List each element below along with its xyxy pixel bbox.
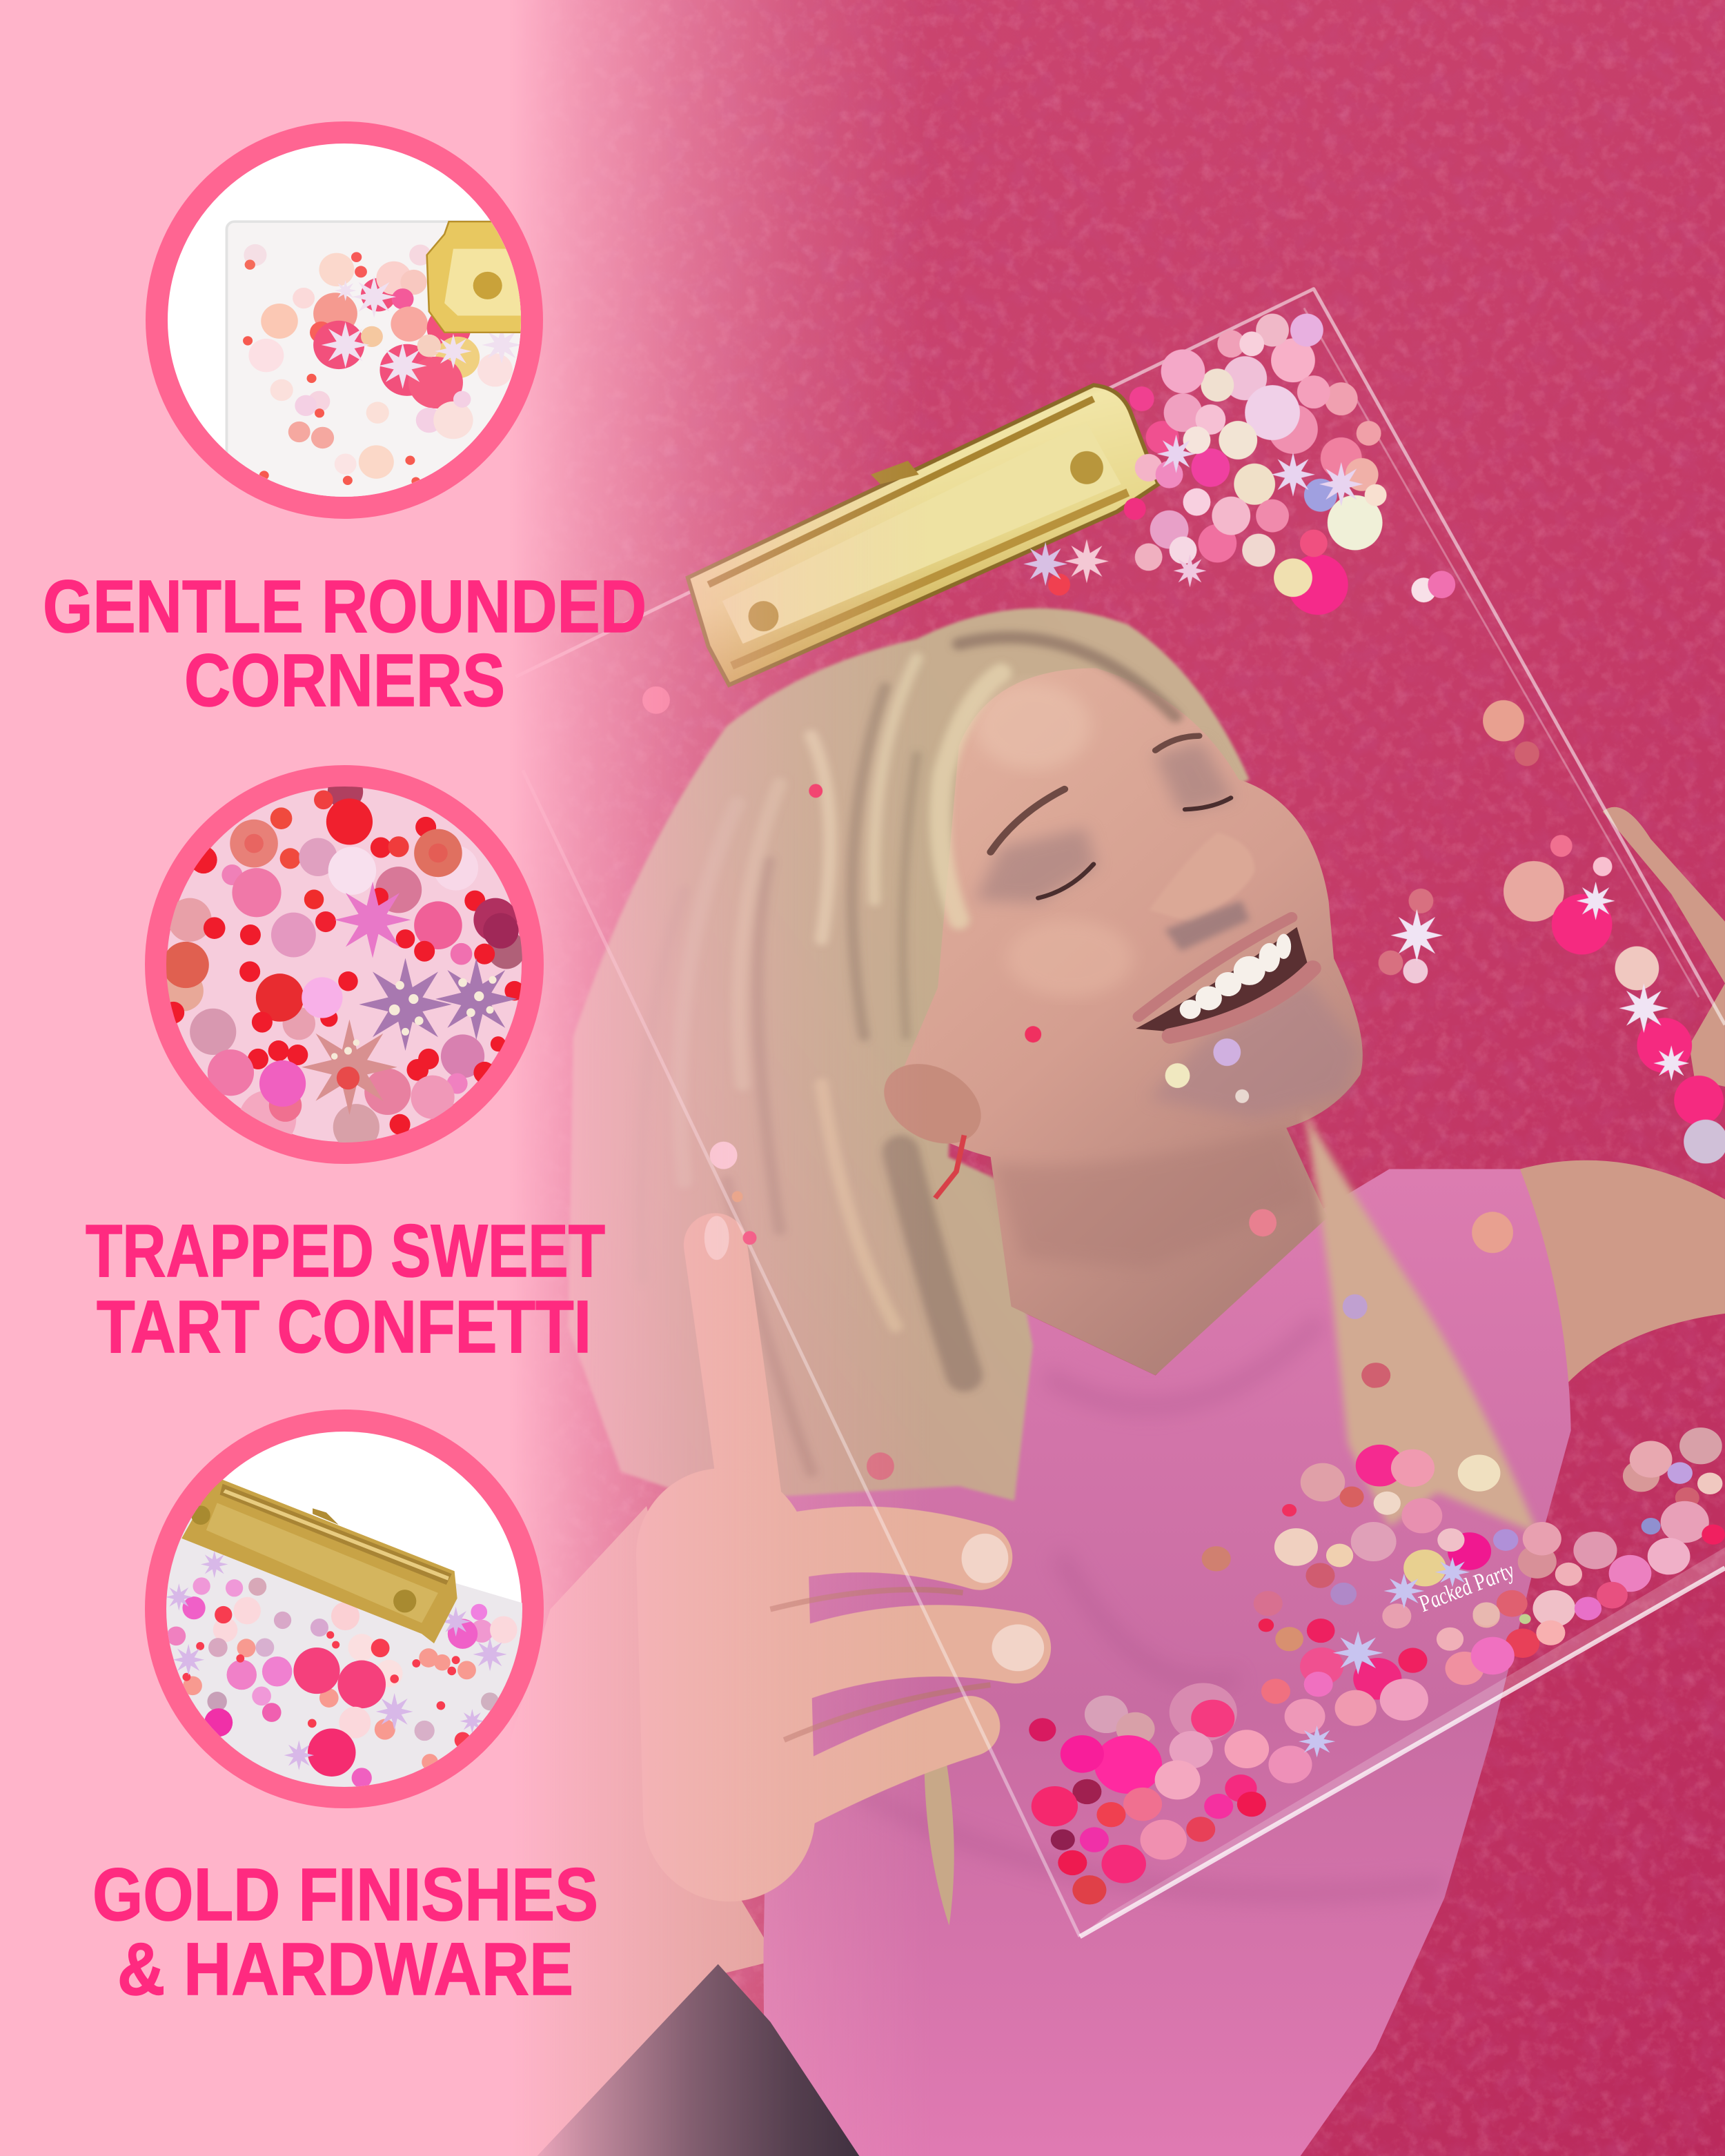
clip knob <box>871 461 919 484</box>
hair fringe and streaks <box>640 637 1176 1472</box>
gold clip <box>181 1480 457 1643</box>
caption: trapped sweet tart confetti: TART CONFETTI <box>97 1285 591 1368</box>
teeth <box>1180 934 1291 1019</box>
confetti cluster: bottom of clipboard <box>1029 1363 1725 1905</box>
gold clip <box>688 385 1159 685</box>
nose <box>1149 833 1254 922</box>
pink top <box>763 1169 1571 2156</box>
caption: trapped sweet tart confetti <box>86 1209 605 1368</box>
red glitter <box>244 834 448 1089</box>
acrylic clipboard edges <box>516 289 1725 1937</box>
caption: gentle rounded corners <box>43 564 647 722</box>
hair and head <box>568 609 1363 1501</box>
lips <box>1138 918 1313 1036</box>
plate corner <box>225 221 521 497</box>
left hand with raised finger <box>716 1245 1015 1816</box>
hair mass <box>568 609 1250 1501</box>
finger shadows <box>770 1590 990 1740</box>
caption: trapped sweet tart confetti: TRAPPED SWEET <box>86 1209 605 1292</box>
finger nails <box>704 1216 1044 1671</box>
smile <box>1136 927 1308 1031</box>
brand script on plate: Packed Party <box>1413 1557 1519 1616</box>
photo: woman holding clipboard <box>303 289 1725 2156</box>
forehead highlight <box>975 682 1091 770</box>
cheek highlight <box>1007 920 1133 997</box>
hair strand lower <box>924 1719 954 1926</box>
gold clip corner <box>427 221 528 333</box>
eyebrows <box>991 736 1199 852</box>
circle 1: rounded corner close-up <box>146 121 543 519</box>
nose shadow <box>1165 900 1250 951</box>
chin shade <box>1149 978 1360 1118</box>
circle 2: trapped confetti close-up <box>156 774 533 1153</box>
arm and hand at right <box>1520 807 1725 1383</box>
caption: gentle rounded corners: CORNERS <box>184 638 505 722</box>
confetti cluster: right edge <box>1379 700 1725 1164</box>
clip rivets <box>749 601 778 631</box>
star glitter <box>331 976 497 1060</box>
hair on right shoulder <box>1304 1111 1538 1534</box>
caption: gold finishes and hardware: & HARDWARE <box>117 1927 573 2010</box>
acrylic bottom band <box>1080 1547 1725 1937</box>
earring <box>935 1135 964 1198</box>
confetti cluster: top-right corner <box>1023 314 1455 615</box>
jeans <box>537 1964 860 2156</box>
caption: gold finishes and hardware: GOLD FINISHES <box>92 1852 598 1936</box>
eye sockets <box>975 741 1234 903</box>
ear <box>867 1047 998 1160</box>
plate <box>138 1490 525 1817</box>
circle 3: gold hardware close-up <box>138 1421 533 1817</box>
neck and face <box>890 668 1363 1375</box>
caption: gold finishes and hardware <box>92 1852 598 2010</box>
scattered confetti dots <box>642 686 1513 1480</box>
shirt folds <box>853 1321 1444 1894</box>
caption: gentle rounded corners: GENTLE ROUNDED <box>43 564 647 648</box>
forearm at left <box>303 1506 777 2156</box>
closed eyes <box>1038 798 1231 898</box>
neck shade <box>991 1128 1308 1268</box>
